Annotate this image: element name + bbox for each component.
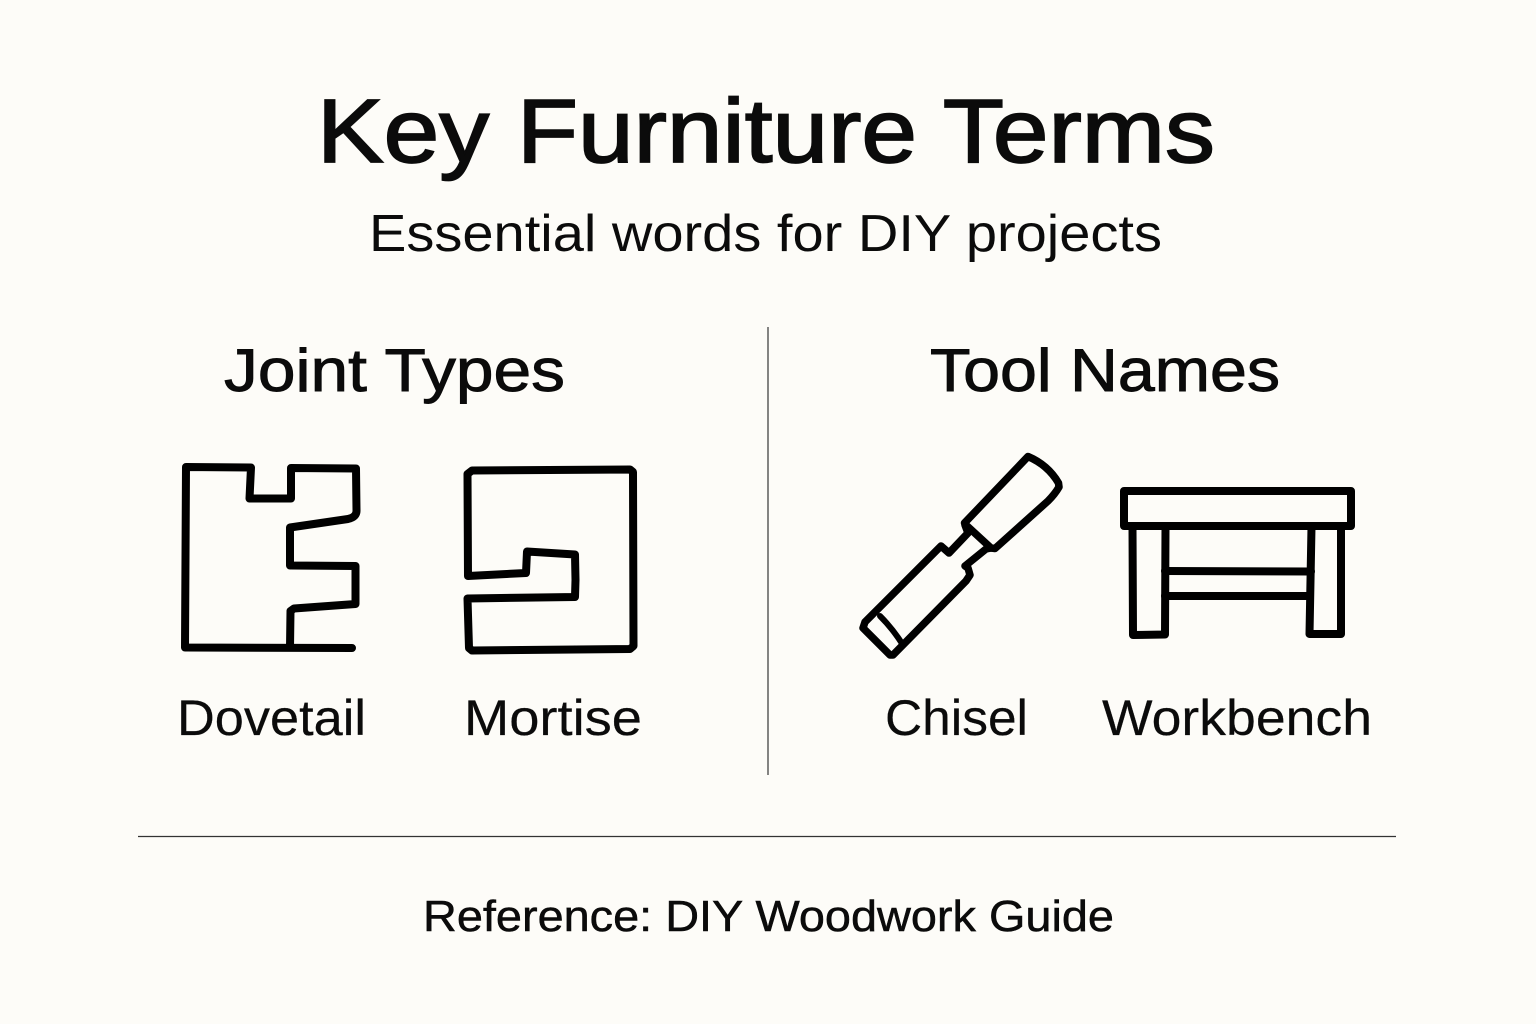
label: mortise: Mortise	[464, 690, 642, 746]
label: chisel: Chisel	[885, 690, 1028, 746]
panel: joint types	[177, 337, 642, 746]
subtitle: Essential words for DIY projects	[369, 205, 1162, 263]
label: dovetail: Dovetail	[177, 690, 366, 746]
label: workbench: Workbench	[1102, 690, 1372, 746]
panel: tool names	[863, 337, 1372, 746]
icon: workbench	[1124, 491, 1351, 635]
title: Key Furniture Terms	[317, 82, 1215, 182]
icon: dovetail joint	[185, 467, 357, 648]
footer reference: Reference: DIY Woodwork Guide	[423, 892, 1114, 941]
icon: chisel	[863, 456, 1059, 655]
icon: mortise joint	[468, 470, 634, 650]
heading: tool names: Tool Names	[930, 337, 1280, 404]
heading: joint types: Joint Types	[224, 337, 565, 404]
